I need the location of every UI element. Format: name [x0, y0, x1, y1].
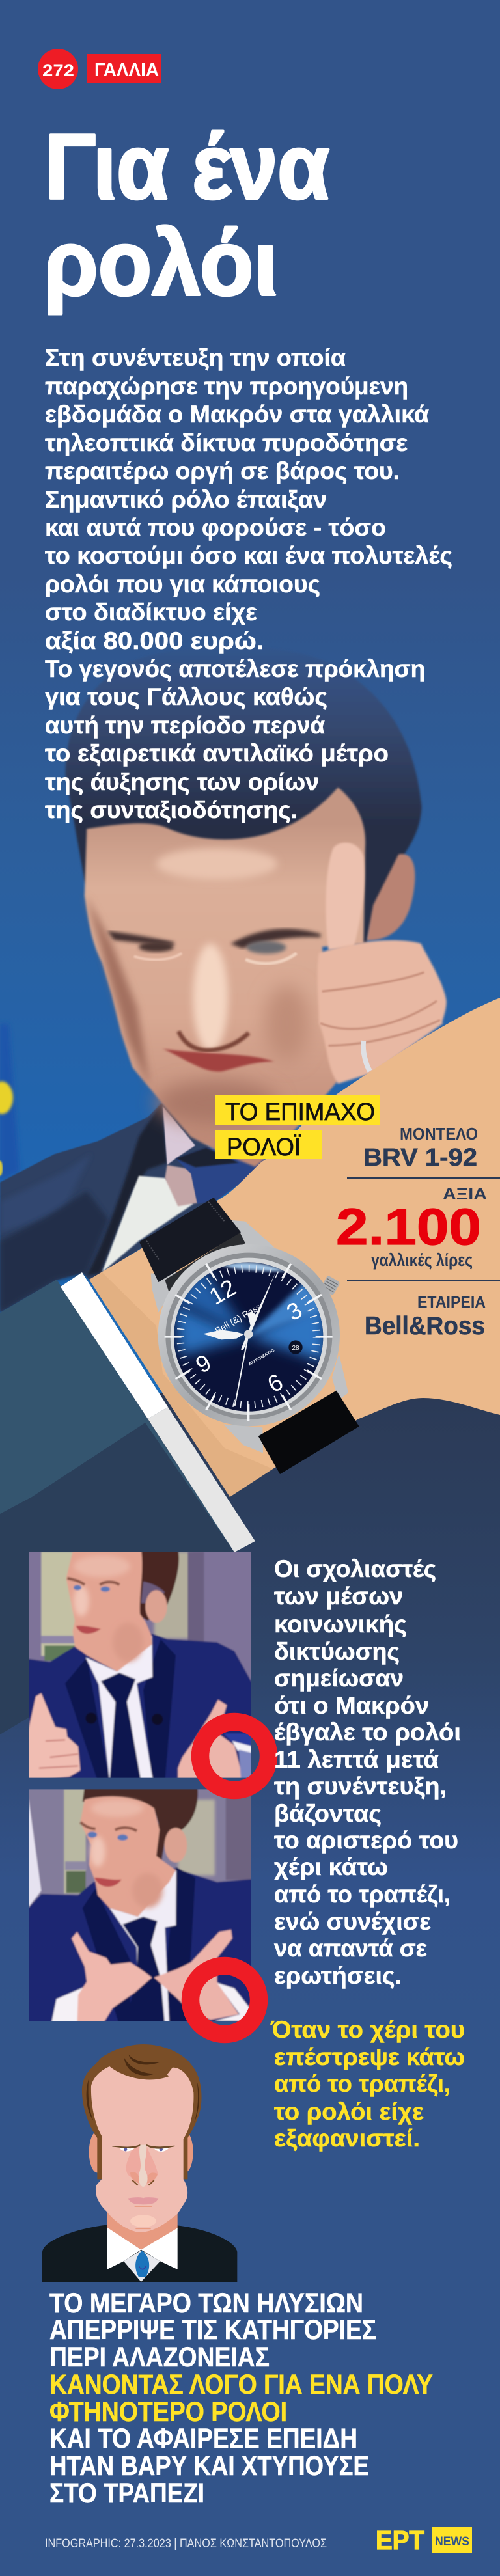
intro text block: παραχώρησε την προηγούμενη: [45, 373, 408, 400]
company: Bell&Ross: [365, 1312, 485, 1340]
features: [80, 1822, 137, 1831]
hands: [203, 1272, 275, 1406]
hair: [82, 2044, 202, 2179]
hour markers: [165, 1264, 333, 1421]
red highlight rings: [190, 1722, 268, 2035]
face: [65, 646, 447, 1167]
right hand: [154, 1930, 239, 2020]
intro text block: αυτή την περίοδο περνά: [45, 712, 325, 739]
shirt: [86, 1636, 153, 1781]
date window: [288, 1340, 303, 1354]
photo 2: watch gone: [26, 1787, 256, 2025]
thumb and fist: [318, 843, 447, 1084]
caricature of Macron: [42, 2044, 237, 2282]
watch facts: [336, 1124, 500, 1340]
illustration: watch: 3: [282, 1296, 307, 1326]
Elysee statement text block: [49, 2288, 433, 2509]
intro text block: και αυτά που φορούσε - τόσο: [45, 514, 386, 541]
country tag: [87, 54, 161, 83]
yellow label: the disputed watch: ΡΟΛΟΪ: [227, 1134, 301, 1161]
company: [365, 1293, 486, 1340]
numerals: 12: [204, 1274, 240, 1310]
brand on dial: Bell (&) Ross: [214, 1301, 262, 1336]
Elysee statement text block: ΚΑΝΟΝΤΑΣ ΛΟΓΟ ΓΙΑ ΕΝΑ ΠΟΛΥ: [49, 2369, 433, 2400]
right cuff: [215, 1983, 249, 2021]
intro text block: το κοστούμι όσο και ένα πολυτελές: [45, 542, 452, 569]
hair: [65, 646, 422, 944]
peach wave panel: [89, 998, 500, 1497]
ear: [145, 1590, 167, 1623]
ear: [367, 854, 415, 940]
collar: [107, 2227, 178, 2269]
geometric stripes: [0, 1272, 255, 1734]
face: [66, 1549, 152, 1671]
suit: [26, 1868, 256, 2025]
yellow text block: Όταν το χέρι του: [270, 2016, 465, 2043]
nose and mouth: [178, 1031, 249, 1050]
face: [80, 1796, 176, 1917]
illustration: watch: AUTOMATIC: [248, 1349, 275, 1367]
nose: [126, 2146, 158, 2180]
hero photo: Macron thumbs up: [0, 646, 447, 1313]
commentators text block: βάζοντας: [274, 1800, 382, 1827]
yellow text block: εξαφανιστεί.: [274, 2125, 420, 2152]
ear: [165, 1828, 187, 1863]
logo: ERT news: ΕΡΤ: [376, 2525, 424, 2555]
minute ticks: [180, 1268, 316, 1405]
Elysee statement text block: ΣΤΟ ΤΡΑΠΕΖΙ: [49, 2478, 204, 2509]
neck: [107, 2205, 178, 2250]
dial: [171, 1261, 326, 1414]
commentators text block: από το τραπέζι,: [274, 1881, 451, 1908]
hair shadow: [87, 2055, 199, 2123]
left hand: [72, 1932, 152, 2025]
eyebrows and eyes: [110, 933, 174, 944]
logo: ERT news: [376, 2525, 472, 2555]
title: [44, 115, 329, 315]
yellow text block: από το τραπέζι,: [274, 2070, 451, 2097]
intro text block: τηλεοπτικά δίκτυα πυροδότησε: [45, 430, 408, 456]
intro text block: Σημαντικό ρόλο έπαιξαν: [45, 486, 327, 513]
commentators text block: των μέσων: [274, 1583, 403, 1610]
value: [336, 1185, 487, 1270]
number circle: [38, 49, 78, 89]
commentators text block: ενώ συνέχισε: [274, 1908, 431, 1935]
value: 2.100: [336, 1198, 481, 1255]
chin: [130, 2215, 156, 2227]
intro text block: στο διαδίκτυο είχε: [45, 599, 257, 625]
skin: [85, 788, 365, 1167]
Elysee statement text block: ΗΤΑΝ ΒΑΡΥ ΚΑΙ ΧΤΥΠΟΥΣΕ: [49, 2450, 369, 2482]
case: [158, 1244, 340, 1426]
commentators text block: να απαντά σε: [274, 1935, 427, 1962]
intro text block: της άυξησης των ορίων: [45, 769, 319, 795]
Elysee statement text block: ΠΕΡΙ ΑΛΑΖΟΝΕΙΑΣ: [49, 2342, 270, 2373]
commentators text block: δικτύωσης: [274, 1638, 400, 1665]
suit: [26, 1634, 256, 1781]
model: BRV 1-92: [363, 1144, 477, 1172]
value: γαλλικές λίρες: [371, 1250, 473, 1270]
illustration: watch: 6: [263, 1368, 287, 1398]
intro text block: για τους Γάλλους καθώς: [45, 683, 327, 710]
commentators text block: ερωτήσεις.: [274, 1962, 402, 1989]
commentators text block: χέρι κάτω: [274, 1854, 388, 1880]
commentators text block: [274, 1555, 461, 1989]
shirt: [109, 1870, 176, 2025]
facial shading: [193, 944, 228, 1052]
commentators text block: το αριστερό του: [274, 1827, 458, 1854]
wedding ring: [363, 1041, 370, 1071]
right hand: [178, 1700, 243, 1779]
lugs: [151, 1220, 348, 1453]
yellow text block: το ρολόι είχε: [274, 2098, 424, 2125]
bottom strap: [258, 1391, 359, 1474]
intro text block: της συνταξιοδότησης.: [45, 797, 298, 823]
yellow label: the disputed watch: [215, 1095, 380, 1161]
microphones: [85, 1712, 97, 1724]
intro text block: εβδομάδα ο Μακρόν στα γαλλικά: [45, 401, 429, 428]
commentators text block: κοινωνικής: [274, 1611, 407, 1637]
number circle: 272: [42, 62, 74, 80]
intro text block: ρολόι που για κάποιους: [45, 571, 320, 597]
commentators text block: 11 λεπτά μετά: [274, 1746, 439, 1773]
top strap: [139, 1198, 241, 1282]
commentators text block: τη συνέντευξη,: [274, 1773, 447, 1800]
Elysee statement text block: ΑΠΕΡΡΙΨΕ ΤΙΣ ΚΑΤΗΓΟΡΙΕΣ: [49, 2314, 376, 2346]
yellow text block: επέστρεψε κάτω: [274, 2044, 465, 2070]
model: [363, 1124, 478, 1172]
suit, shirt and tie: [0, 1103, 267, 1313]
left cuff: [51, 1987, 83, 2025]
company: ΕΤΑΙΡΕΙΑ: [417, 1293, 486, 1311]
illustration: watch: [139, 1198, 359, 1474]
commentators text block: σημείωσαν: [274, 1665, 404, 1692]
eyes and brows: [119, 2148, 169, 2152]
title: ρολόι: [44, 212, 278, 315]
Elysee statement text block: ΚΑΙ ΤΟ ΑΦΑΙΡΕΣΕ ΕΠΕΙΔΗ: [49, 2423, 357, 2454]
jacket: [42, 2225, 237, 2282]
crown: [320, 1275, 340, 1296]
header badge: [38, 49, 161, 89]
Elysee statement text block: ΦΤΗΝΟΤΕΡΟ ΡΟΛΟΙ: [49, 2396, 287, 2428]
hair: [83, 1787, 198, 1860]
yellow text block: [270, 2016, 465, 2152]
intro text block: [45, 344, 452, 823]
illustration: watch: 9: [191, 1349, 215, 1378]
photo 1: wearing the watch: [26, 1549, 256, 1781]
date window: 28: [292, 1345, 299, 1352]
intro text block: το εξαιρετικά αντιλαϊκό μέτρο: [45, 740, 389, 767]
ears: [89, 2131, 105, 2172]
commentators text block: έβγαλε το ρολόι: [274, 1719, 461, 1746]
title: Για ένα: [45, 115, 329, 219]
commentators text block: Οι σχολιαστές: [274, 1555, 436, 1582]
hair: [139, 1552, 180, 1621]
intro text block: περαιτέρω οργή σε βάρος του.: [45, 458, 400, 484]
Elysee statement text block: ΤΟ ΜΕΓΑΡΟ ΤΩΝ ΗΛΥΣΙΩΝ: [49, 2288, 363, 2319]
face: [91, 2066, 193, 2232]
intro text block: αξία 80.000 ευρώ.: [45, 627, 264, 654]
intro text block: Στη συνέντευξη την οποία: [45, 344, 346, 371]
mouth: [128, 2197, 158, 2204]
tie: [101, 1673, 141, 1781]
footer credit: INFOGRAPHIC: 27.3.2023 | ΠΑΝΟΣ ΚΩΝΣΤΑΝΤΟΠΟΥΛΟΣ: [45, 2537, 327, 2551]
commentators text block: ότι ο Μακρόν: [274, 1692, 429, 1719]
logo: ERT news: NEWS: [435, 2535, 469, 2549]
value: ΑΞΙΑ: [443, 1185, 487, 1203]
tie: [122, 1917, 165, 2025]
tie: [135, 2251, 149, 2277]
EU flag behind: [0, 1024, 20, 1180]
model: ΜΟΝΤΕΛΟ: [400, 1124, 478, 1144]
cuff and watch: [224, 1733, 251, 1747]
intro text block: Το γεγονός αποτέλεσε πρόκληση: [45, 655, 425, 682]
yellow label: the disputed watch: ΤΟ ΕΠΙΜΑΧΟ: [225, 1099, 375, 1126]
country tag: ΓΑΛΛΙΑ: [94, 60, 159, 81]
features: [67, 1578, 119, 1585]
left hand: [26, 1693, 80, 1781]
